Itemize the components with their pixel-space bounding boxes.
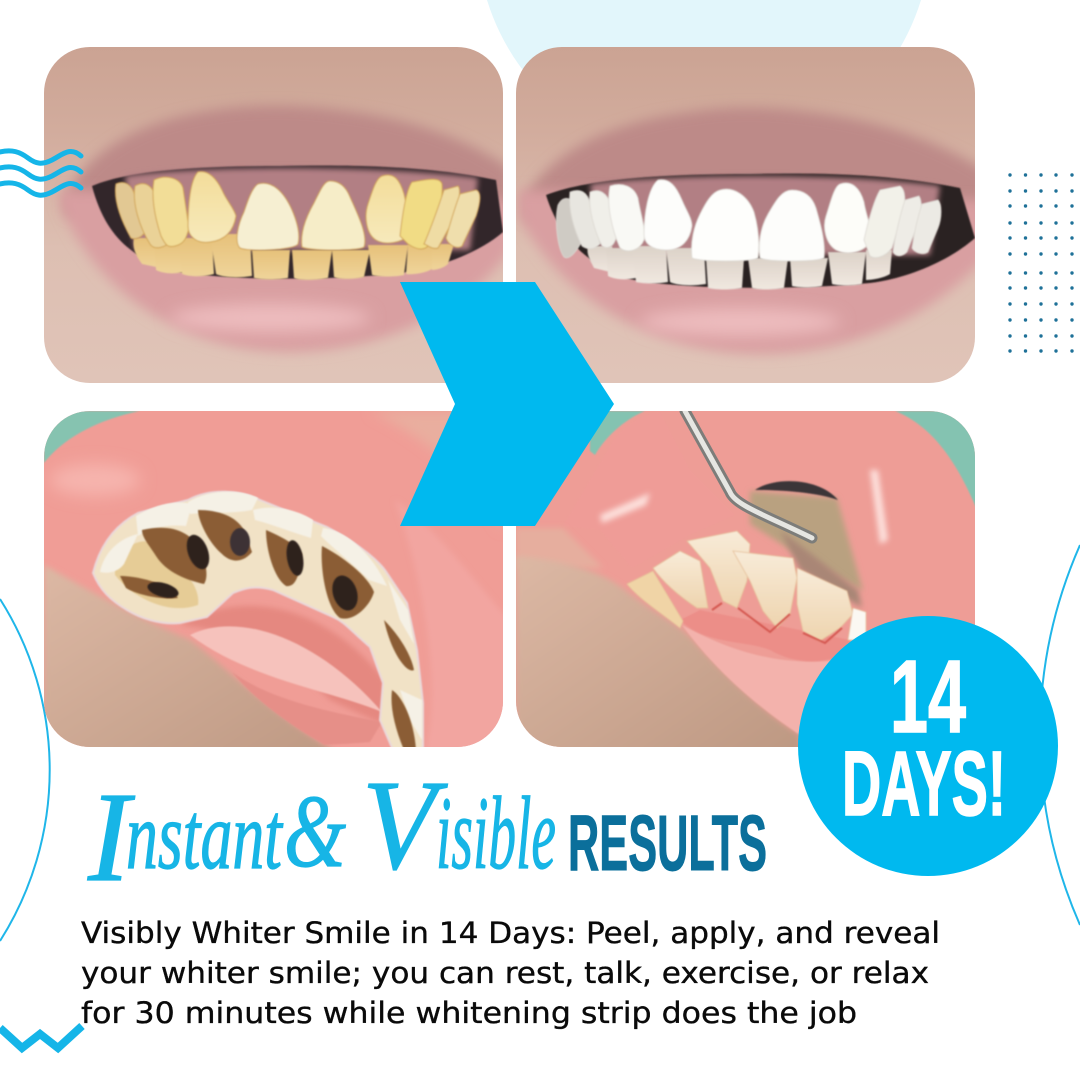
dark decay spots	[146, 528, 362, 614]
teal corners	[590, 411, 980, 517]
upper teeth	[556, 180, 941, 261]
upper lip glow	[50, 464, 140, 496]
icon: waves	[0, 151, 81, 195]
heading: RESULTS	[568, 798, 767, 887]
upper lip	[527, 104, 975, 206]
heading: V	[362, 754, 448, 896]
body text	[81, 916, 940, 1030]
dental tool	[685, 411, 812, 538]
body text: for 30 minutes while whitening strip does the job	[81, 996, 857, 1030]
lower lip	[518, 190, 985, 354]
heading: isible	[436, 776, 556, 891]
upper lip	[66, 106, 510, 215]
teeth	[627, 531, 866, 641]
top right skin	[386, 411, 452, 450]
white incisal edges	[100, 492, 422, 740]
panel: before, yellow teeth	[44, 47, 510, 383]
mouth interior	[92, 166, 503, 279]
gum band	[680, 610, 852, 661]
arrow	[400, 282, 614, 526]
heading: nstant	[126, 782, 284, 889]
gums	[590, 176, 940, 255]
skin beige corner	[44, 566, 332, 747]
lower teeth	[587, 246, 892, 290]
lower lip	[232, 672, 382, 745]
plaque tooth band	[93, 492, 423, 750]
background top tint circle	[487, 0, 921, 160]
tan tooth body	[115, 541, 198, 608]
panel: stained plaque teeth	[44, 411, 510, 760]
heading: &	[284, 774, 346, 889]
brown stains	[120, 510, 416, 750]
badge: 14 days	[798, 616, 1058, 876]
right decorative arc	[1040, 545, 1080, 925]
dark mirror rim	[755, 481, 838, 500]
gums	[125, 168, 478, 250]
pale skin strip	[516, 528, 603, 568]
right lip	[402, 510, 503, 747]
panel: after, white teeth	[516, 47, 985, 383]
body text: Visibly Whiter Smile in 14 Days: Peel, apply, and reveal	[81, 916, 940, 950]
beige skin	[516, 556, 800, 755]
upper teeth	[115, 172, 480, 250]
heading: I	[87, 766, 135, 908]
heading	[87, 754, 767, 908]
panel: cleaned teeth with dental tool	[516, 411, 980, 755]
tongue	[190, 626, 382, 712]
left decorative arc	[0, 599, 50, 941]
badge: 14 days: 14	[890, 639, 966, 754]
lower lip	[683, 626, 830, 734]
icon: zigzag	[0, 1026, 82, 1048]
gum lines	[712, 603, 842, 643]
inner mouth red	[180, 606, 385, 725]
upper lip left	[563, 412, 735, 568]
dot grid	[1008, 173, 1074, 353]
lower teeth	[133, 234, 454, 280]
mirror head	[750, 491, 863, 591]
mouth shade	[780, 530, 862, 608]
lip highlights	[600, 470, 888, 544]
mouth interior	[546, 174, 975, 288]
teal corner	[44, 411, 140, 463]
lower lip	[60, 190, 510, 352]
body text: your whiter smile; you can rest, talk, exercise, or relax	[81, 956, 929, 990]
lower lip highlight	[170, 304, 370, 332]
lower lip highlight	[640, 308, 840, 336]
